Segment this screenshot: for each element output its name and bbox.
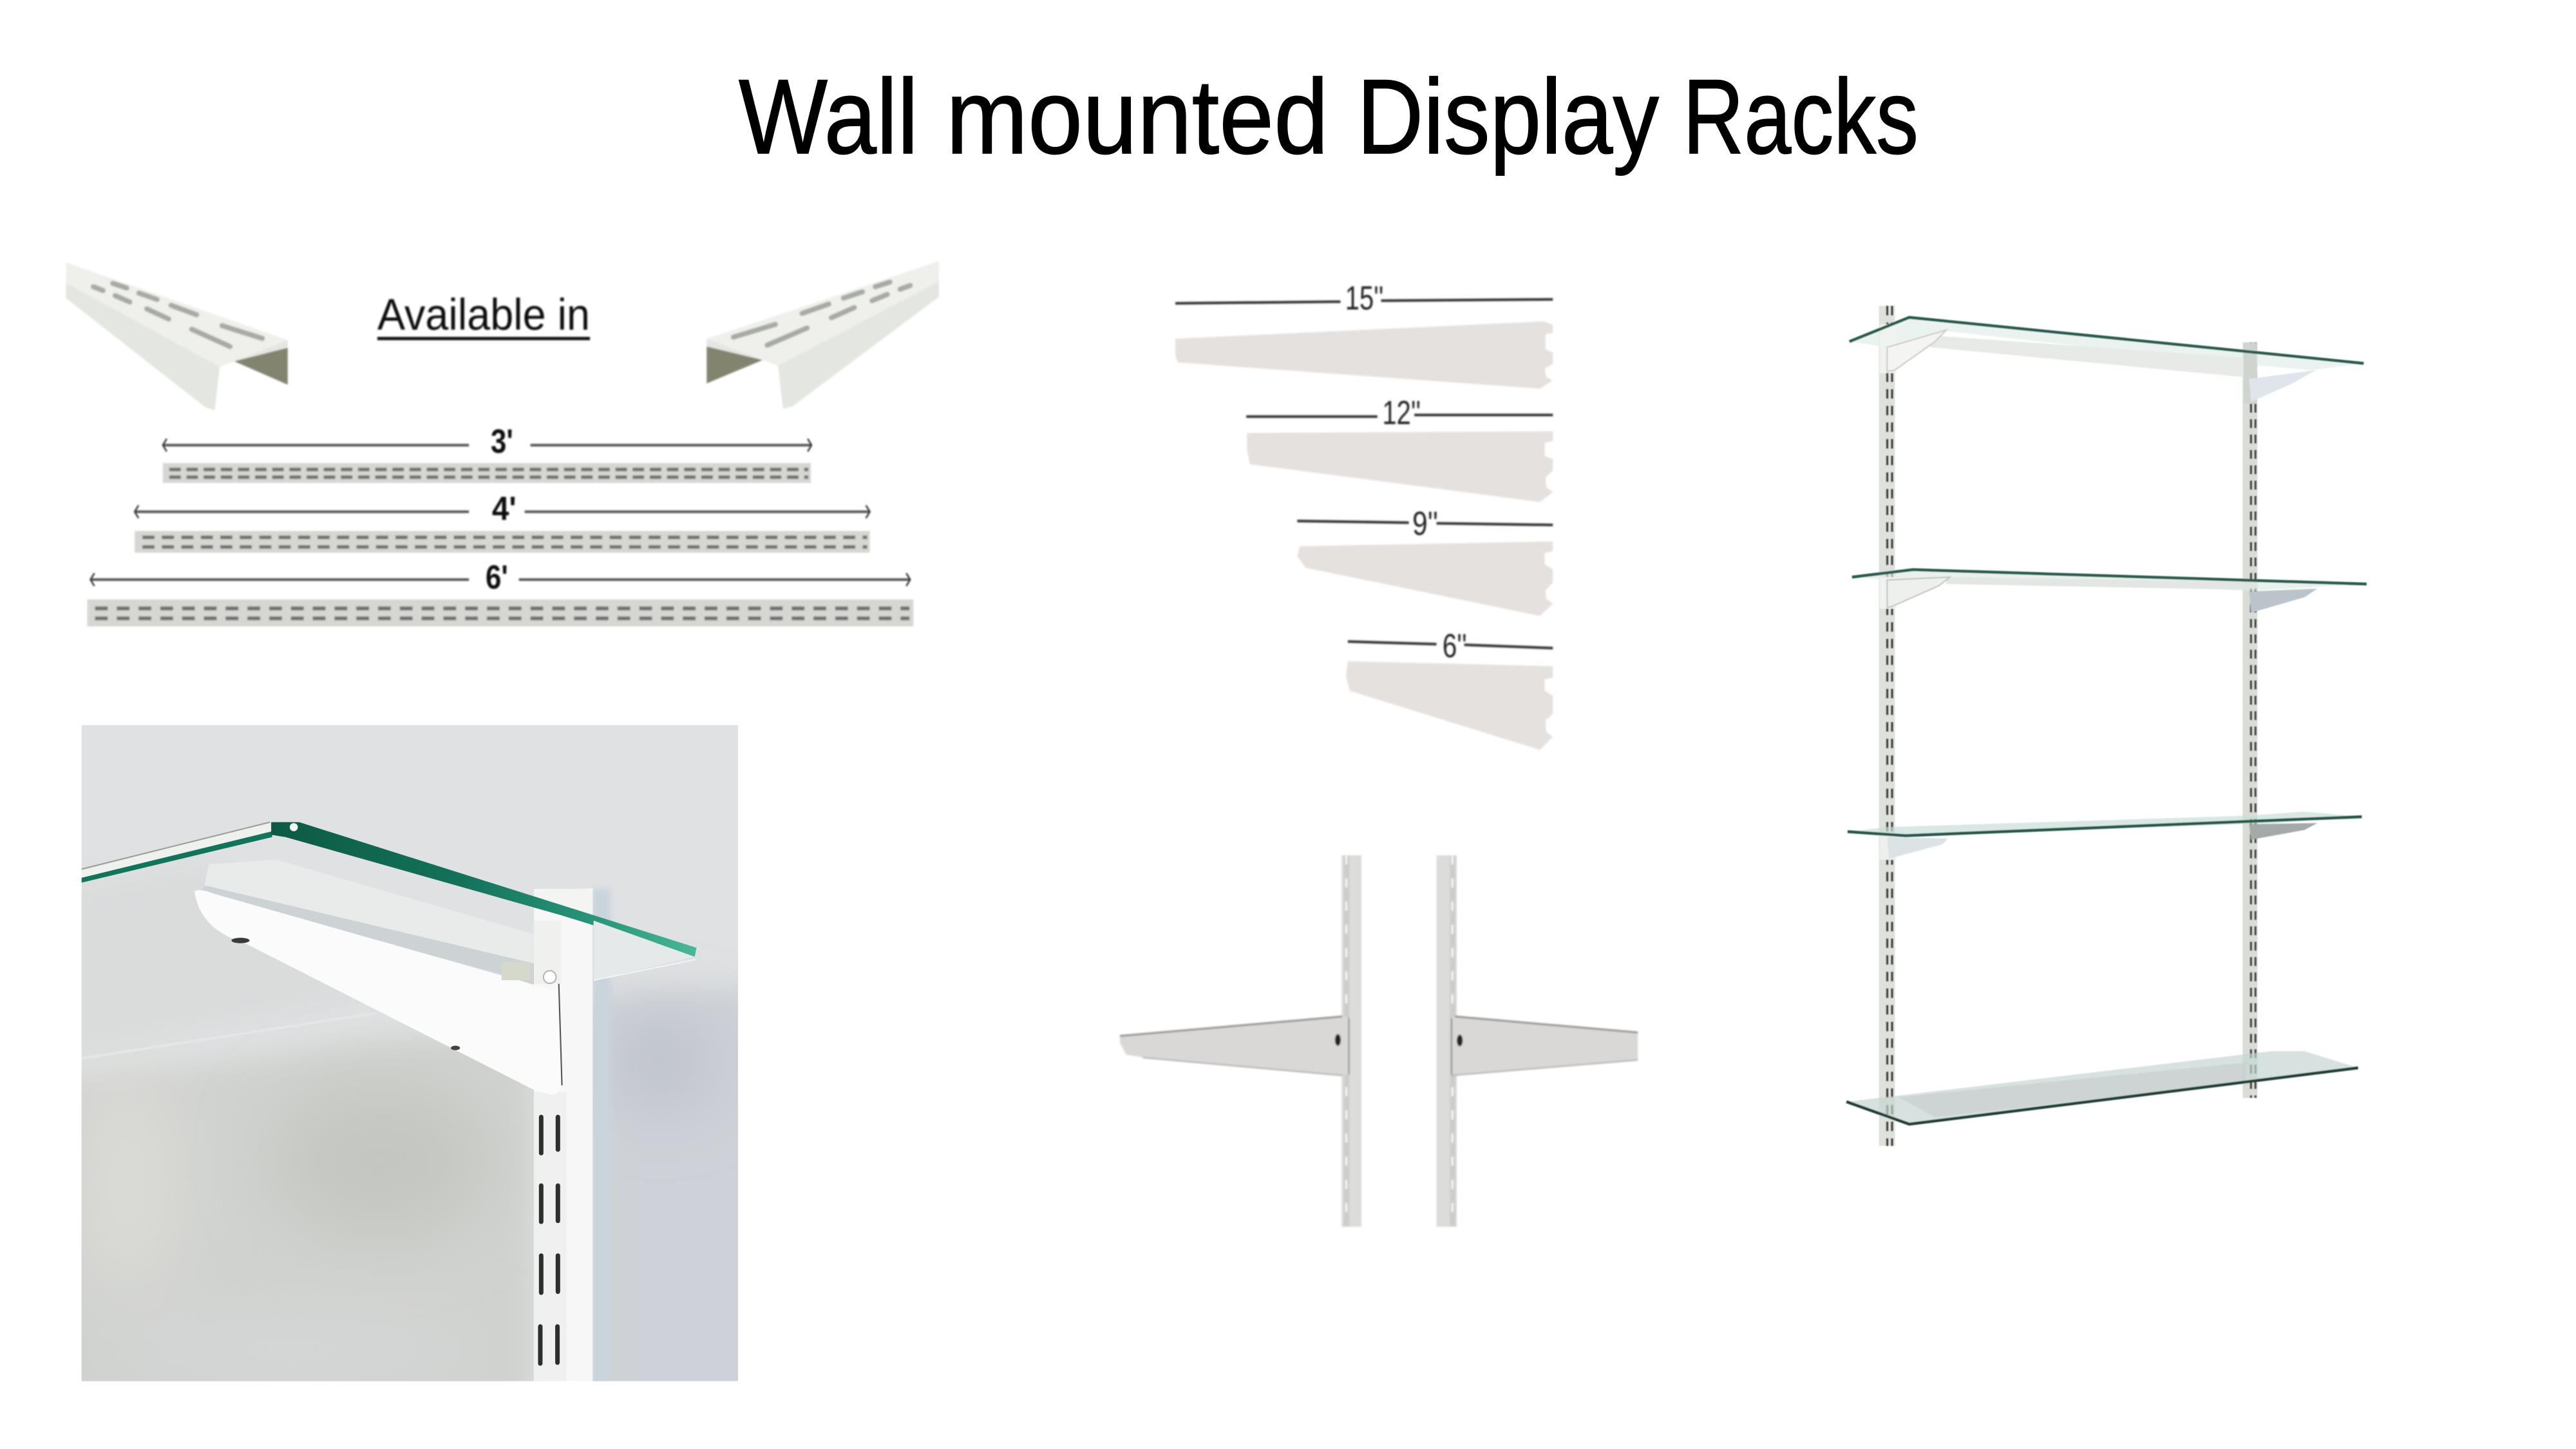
shelf 3 (1848, 811, 2362, 860)
shelf 4 (1846, 1051, 2358, 1124)
bracket 12 inch: 12'' (1382, 394, 1421, 431)
panel: bracket mounted on rails (1120, 855, 1638, 1227)
icon: left channel end (66, 263, 288, 410)
bracket flange (200, 886, 534, 985)
wall rail with slots (534, 888, 592, 1381)
shelf 1 (1850, 317, 2363, 404)
title: mounted (946, 57, 1329, 176)
rail: 3 foot (163, 463, 811, 483)
right upright (2242, 343, 2257, 1098)
bracket 6 inch: 6'' (1443, 627, 1467, 665)
title: Display (1357, 57, 1659, 176)
bracket 9 inch (1297, 505, 1553, 616)
glass underside (204, 860, 534, 966)
green glass edge (82, 822, 697, 980)
left rail (1341, 855, 1361, 1227)
rail: 6 foot (88, 600, 913, 627)
dimension: 3 foot: 3' (491, 422, 513, 460)
dimension: 6 foot (91, 558, 910, 596)
dimension: 6 foot: 6' (486, 558, 508, 596)
title (739, 57, 1918, 176)
white bracket (194, 890, 562, 1095)
panel: assembled glass shelving (1846, 306, 2367, 1146)
bracket 6 inch (1346, 627, 1553, 750)
right rail (1437, 855, 1457, 1227)
right bracket (1452, 1016, 1638, 1076)
dimension: 3 foot (163, 422, 811, 460)
panel: upright channel lengths (66, 261, 939, 627)
bracket 15 inch (1175, 279, 1553, 389)
photo: glass shelf on bracket (81, 725, 738, 1381)
panel: bracket sizes (1175, 279, 1553, 750)
dimension: 4 foot: 4' (492, 490, 516, 527)
bracket 9 inch: 9'' (1412, 505, 1438, 542)
title: Wall (739, 57, 918, 176)
title: Racks (1683, 57, 1918, 176)
icon: right channel end (706, 261, 939, 409)
bracket 12 inch (1246, 394, 1553, 502)
left upright (1879, 306, 1895, 1146)
dimension: 4 foot (135, 490, 870, 527)
shelf reflection line (82, 1054, 117, 1059)
photo wall background (81, 725, 738, 1381)
bracket 15 inch: 15'' (1345, 279, 1383, 317)
rail: 4 foot (135, 531, 870, 553)
heading: available in: Available in (377, 290, 590, 339)
shelf 2 (1852, 570, 2367, 612)
left bracket (1120, 1016, 1350, 1076)
